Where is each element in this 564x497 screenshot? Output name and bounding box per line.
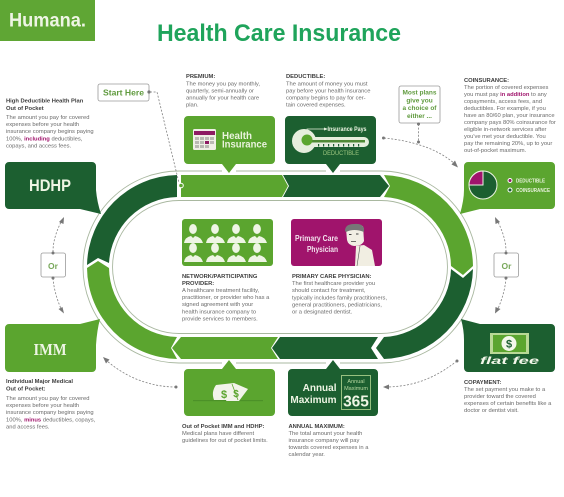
physician text [292,274,387,316]
connector: or right: Or [502,261,512,271]
deductible text: pay before your health insurance [286,88,370,94]
start here label: Start Here [103,88,144,98]
physician text: should contact for treatment, [292,288,366,294]
label: flat fee: flat fee [480,356,540,367]
network text: signed agreement with your [182,302,253,308]
icon: thermometer gauge [292,128,369,153]
icon: eight providers [184,224,267,262]
annual maximum text [288,424,369,458]
physician text: or a designated dentist. [292,310,353,316]
panel: copayment flat fee [461,319,555,372]
IMM text: 100%, minus deductibles, copays, [6,418,96,424]
label: annual maximum: Annual [303,383,337,394]
coinsurance text: copayments, access fees, and [464,99,542,105]
physician text: general practitioners, pediatricians, [292,302,382,308]
callout: most plans: Most plans [403,90,437,96]
coinsurance text: you've met your deductible. You [464,134,546,140]
network text: practitioner, or provider who has a [182,295,270,301]
network text: PROVIDER: [182,281,214,287]
premium text: The money you pay monthly, [186,82,260,88]
physician text: PRIMARY CARE PHYSICIAN: [292,274,372,280]
icon: 365 sign: Annual [347,379,365,385]
out of pocket text: Out of Pocket IMM and HDHP: [182,424,265,430]
callout: most plans: either ... [407,113,432,120]
label: deductible: DEDUCTIBLE [323,151,359,157]
arrow: flat fee to annual maximum [383,360,458,390]
physician text: The first healthcare provider you [292,281,375,287]
icon: 365 sign [342,376,370,410]
HDHP text: Out of Pocket [6,106,44,112]
HDHP text: High Deductible Health Plan [6,98,84,104]
icon: dollar bills [193,383,263,401]
panel: IMM: IMM [34,340,66,359]
coinsurance text: company pays 80% coinsurance for [464,120,556,126]
copayment text: doctor or dentist visit. [464,408,519,414]
coinsurance text: eligible in-network services after [464,127,547,133]
callout: most plans: give you [406,98,433,104]
panel: HDHP: HDHP [29,176,71,195]
panel: IMM [5,319,100,372]
panel: health insurance [184,116,275,173]
IMM text: Individual Major Medical [6,379,73,385]
annual maximum text: The total amount your health [288,431,362,437]
coinsurance text: deductibles. For example, if you [464,106,546,112]
deductible text: The amount of money you must [286,82,368,88]
IMM text [6,379,96,430]
panel: out of pocket [184,360,275,416]
premium text [186,74,260,108]
arrow: out of pocket to IMM [103,357,178,388]
copayment text: COPAYMENT: [464,380,501,386]
logo: Humana: Humana. [9,10,86,32]
premium text: annually for your health care [186,96,259,102]
network text: health insurance company to [182,310,256,316]
icon: dollar bills: $ [233,389,239,400]
premium text: PREMIUM: [186,74,215,80]
arrow: most plans to deductible and coinsurance [382,122,458,168]
label: health insurance [222,131,267,150]
deductible text [286,74,370,108]
panel: annual maximum [288,360,378,416]
legend: COINSURANCE [516,188,551,194]
IMM text: The amount you pay for covered [6,396,89,402]
label: insurance pays: Insurance Pays [328,127,367,133]
label: primary care physician: Primary Care [295,234,338,243]
network text: A healthcare treatment facility, [182,288,260,294]
IMM text: expenses before your health [6,403,79,409]
label: health insurance: Health [222,131,252,142]
copayment text [464,380,552,414]
HDHP text: expenses before your health [6,122,79,128]
icon: dollar bills: $ [221,389,227,401]
premium text: quarterly, semi-annually or [186,88,254,94]
callout: most plans [399,86,440,123]
oval track [83,171,477,363]
annual maximum text: towards covered expenses in a [288,445,369,451]
coinsurance text: pay the remaining 20%, up to your [464,141,552,147]
premium text: plan. [186,102,199,108]
icon: banknote: $ [506,338,512,350]
coinsurance text: The portion of covered expenses [464,85,549,91]
panel: coinsurance [460,162,555,214]
network text [182,274,270,322]
icon: calendar [193,129,216,150]
coinsurance text: have an 80/60 plan, your insurance [464,113,555,119]
label: primary care physician [295,234,338,254]
callout: most plans: a choice of [403,105,437,112]
deductible text: DEDUCTIBLE: [286,74,325,80]
copayment text: expenses of certain benefits like a [464,401,552,407]
network text: provide services to members. [182,316,258,322]
legend: DEDUCTIBLE [516,178,546,184]
connector: or left [41,217,66,314]
connector: or left: Or [48,261,59,271]
deductible text: company begins to pay for cer- [286,96,366,102]
annual maximum text: calendar year. [288,452,325,458]
annual maximum text: ANNUAL MAXIMUM: [288,424,345,430]
coinsurance text: out-of-pocket maximum. [464,148,527,154]
network text: NETWORK/PARTICIPATING [182,274,258,280]
IMM text: and access fees. [6,424,50,430]
start here label [98,84,149,101]
panel: HDHP [5,162,101,214]
IMM text: Out of Pocket: [6,386,46,392]
deductible text: tain covered expenses. [286,102,346,108]
chart: pie [469,171,497,199]
HDHP text: insurance company begins paying [6,129,94,135]
HDHP text: The amount you pay for covered [6,115,89,121]
coinsurance text: COINSURANCE: [464,78,509,84]
coinsurance text: you must pay in addition to any [464,92,547,98]
panel: deductible [285,116,376,173]
title: Health Care Insurance [157,20,401,47]
label: annual maximum: Maximum [290,395,337,406]
coinsurance text [464,78,556,154]
panel: primary care physician [291,219,382,266]
label: health insurance: Insurance [222,140,267,150]
label: annual maximum [290,383,337,406]
HDHP text [6,98,94,150]
label: primary care physician: Physician [307,245,338,254]
arrow: start here to track [147,90,183,188]
icon: 365 sign: Maximum [344,386,368,392]
HDHP text: copays, and access fees. [6,144,71,150]
out of pocket text: Medical plans have different [182,431,254,437]
IMM text: insurance company begins paying [6,410,94,416]
physician text: typically includes family practitioners, [292,296,387,302]
icon: doctor [345,224,375,266]
legend [508,178,551,194]
icon: 365 sign: 365 [343,394,369,410]
panel: network providers [182,219,273,266]
HDHP text: 100%, including deductibles, [6,136,83,142]
copayment text: The set payment you make to a [464,387,546,393]
logo: Humana [0,0,95,41]
annual maximum text: insurance company will pay [288,438,359,444]
copayment text: provider toward the covered [464,394,536,400]
connector: or right [494,217,518,314]
out of pocket text: guidelines for out of pocket limits. [182,438,268,444]
out of pocket text [182,424,268,444]
